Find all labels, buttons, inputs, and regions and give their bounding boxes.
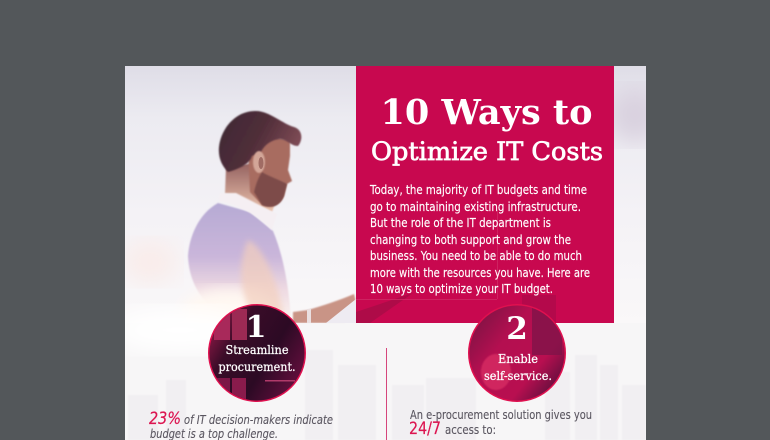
stat text: 23%: 23%: [149, 409, 181, 429]
intro text: changing to both support and grow the: [370, 233, 571, 247]
stat text: 23%: of IT decision-makers indicate: [184, 413, 333, 427]
intro text: business. You need to be able to do much: [370, 249, 582, 263]
title: 10 Ways to: [380, 92, 592, 133]
photo: city skyline band: [110, 308, 646, 440]
badge label: Streamline: [226, 343, 288, 357]
tablet: [326, 299, 356, 323]
stat text: 24/7: [410, 410, 592, 436]
ear: [253, 151, 265, 173]
stat text: 24/7: access to:: [445, 423, 496, 437]
intro text: But the role of the IT department is: [370, 216, 551, 230]
intro text: go to maintaining existing infrastructure.: [370, 200, 581, 214]
panel: title box: [356, 66, 614, 323]
stat text: 23%: [149, 409, 333, 440]
shirt: [188, 203, 291, 323]
badge 2: Enable self-service: self-service.: [484, 369, 552, 383]
stat text: 24/7: 24/7: [409, 419, 441, 439]
badge label: Enable: [498, 352, 538, 366]
neck: [224, 163, 275, 212]
photo: man with tablet: [182, 111, 356, 336]
face: [248, 135, 292, 206]
intro text: 10 ways to optimize your IT budget.: [370, 282, 553, 296]
number 2: 2: [506, 311, 528, 347]
intro text: [369, 183, 590, 296]
badge 1: Streamline procurement: [208, 304, 306, 402]
panel: hero photo: [110, 66, 663, 440]
subtitle: Optimize IT Costs: [371, 137, 603, 166]
badge 1: Streamline procurement: procurement.: [218, 360, 296, 374]
number 1: 1: [246, 310, 266, 345]
intro text: more with the resources you have. Here are: [370, 266, 590, 280]
stat text: 24/7: An e-procurement solution gives you: [410, 408, 592, 422]
arm and hand: [293, 294, 356, 323]
collar: [224, 192, 272, 230]
hair: [219, 111, 301, 172]
intro text: Today, the majority of IT budgets and time: [369, 183, 587, 197]
divider line: [386, 348, 387, 440]
badge 2: Enable self-service: [468, 304, 566, 402]
